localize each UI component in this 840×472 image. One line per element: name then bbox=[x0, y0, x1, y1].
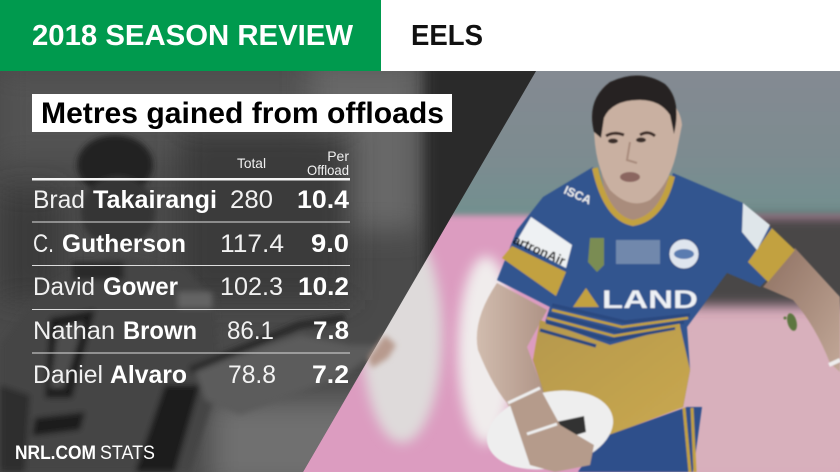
shorts bbox=[578, 407, 702, 472]
row: Daniel Alvaro: 78.8 bbox=[228, 361, 276, 389]
row: C. Gutherson: 117.4 bbox=[220, 230, 284, 258]
ISCA logo: ISCA bbox=[562, 183, 594, 208]
jersey gold lower panel bbox=[533, 320, 690, 435]
row: Nathan Brown: 86.1 bbox=[227, 317, 274, 345]
row: C. Gutherson: Gutherson bbox=[62, 230, 186, 258]
chart title: Metres gained from offloads bbox=[41, 97, 444, 130]
background photo: stadium and pink hoarding bbox=[290, 60, 840, 472]
neck bbox=[600, 165, 668, 228]
row: David Gower bbox=[33, 273, 349, 301]
row: Nathan Brown: Nathan bbox=[33, 317, 115, 345]
player arms bbox=[477, 248, 840, 457]
sleeve sponsor text: artronAir bbox=[511, 232, 568, 268]
shorts stripes bbox=[684, 408, 695, 472]
jersey chevrons bbox=[540, 305, 690, 346]
hand beyond the panel edge bbox=[368, 335, 396, 368]
row: Daniel Alvaro bbox=[33, 361, 349, 389]
jersey gold collar bbox=[595, 168, 672, 223]
row: Brad Takairangi: Brad bbox=[33, 186, 85, 214]
row: Daniel Alvaro: Daniel bbox=[33, 361, 103, 389]
grass on arm bbox=[784, 312, 799, 332]
row: Nathan Brown bbox=[33, 317, 349, 345]
wrist band bbox=[829, 360, 840, 365]
row: Brad Takairangi: Takairangi bbox=[93, 186, 217, 214]
row: David Gower: 102.3 bbox=[220, 273, 283, 301]
column headers: Total bbox=[237, 155, 266, 171]
row: C. Gutherson bbox=[33, 230, 349, 258]
sleeve patch bbox=[516, 217, 572, 268]
stats table bbox=[32, 148, 350, 389]
column headers: Offload bbox=[307, 162, 349, 178]
ball logo bbox=[556, 416, 586, 440]
team name: EELS bbox=[411, 20, 483, 52]
row: C. Gutherson: 9.0 bbox=[311, 230, 349, 258]
row: Brad Takairangi: 10.4 bbox=[297, 186, 349, 214]
row: David Gower: Gower bbox=[103, 273, 178, 301]
NRL badge bbox=[588, 238, 604, 272]
row: Daniel Alvaro: 7.2 bbox=[312, 361, 349, 389]
row: Daniel Alvaro: Alvaro bbox=[110, 361, 187, 389]
row: Brad Takairangi: 280 bbox=[230, 186, 273, 214]
player head bbox=[592, 75, 682, 203]
row: David Gower: David bbox=[33, 273, 95, 301]
player photo bbox=[477, 75, 840, 472]
row: Brad Takairangi bbox=[33, 186, 349, 214]
row: C. Gutherson: C. bbox=[33, 230, 54, 258]
column headers bbox=[237, 148, 349, 178]
left monochrome photo panel bbox=[0, 60, 555, 472]
footer logo bbox=[15, 443, 155, 464]
row: Nathan Brown: 7.8 bbox=[313, 317, 349, 345]
row: Nathan Brown: Brown bbox=[123, 317, 197, 345]
header title: 2018 SEASON REVIEW bbox=[32, 20, 354, 52]
club badge bbox=[669, 239, 699, 269]
wrist bands bbox=[508, 388, 557, 434]
header bar bbox=[0, 0, 840, 71]
row: David Gower: 10.2 bbox=[298, 273, 349, 301]
forearm over the ball bbox=[509, 390, 594, 472]
footer logo: STATS bbox=[100, 443, 155, 464]
jersey sponsor text: LAND bbox=[602, 286, 698, 314]
football bbox=[479, 380, 621, 472]
footer logo: NRL.COM bbox=[15, 443, 96, 464]
jersey bbox=[497, 167, 795, 433]
column headers: Per bbox=[327, 148, 349, 164]
sleeve gold bands bbox=[502, 228, 795, 296]
jersey sponsor panel bbox=[616, 240, 660, 264]
jersey logo triangle bbox=[573, 288, 599, 307]
